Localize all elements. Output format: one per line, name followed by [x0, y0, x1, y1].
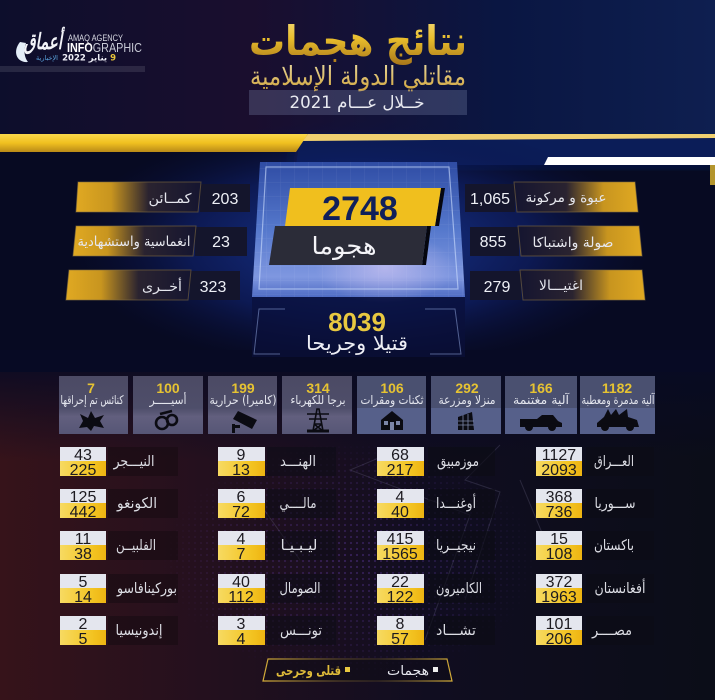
country: Philippines: 11 [75, 531, 91, 548]
icon: damaged car [597, 409, 639, 431]
country: Syria: ســـوريا [594, 496, 636, 512]
stat tile: homes and farms [431, 376, 501, 434]
country: Syria: 736 [546, 504, 572, 521]
country: Congo [60, 489, 178, 521]
stat tile: prisoners: 100 [156, 380, 180, 396]
stat tile: burned churches [59, 376, 128, 434]
stat tile: electricity towers: برجا للكهرباء [290, 393, 346, 408]
stat tile: prisoners [133, 376, 203, 434]
attack type: suicide operations [73, 226, 247, 256]
country: Niger: النيـــجر [113, 454, 154, 470]
stat tile: burned churches: كنائس تم إحراقها [60, 393, 124, 408]
country: Mozambique: 68 [391, 447, 409, 464]
country: Somalia: الصومال [280, 581, 320, 597]
country: Tunisia: تونـــس [280, 623, 322, 639]
stat tile: electricity towers: 314 [306, 380, 330, 396]
country: Syria [536, 489, 654, 521]
agency name: AMAQ AGENCY [68, 33, 123, 43]
country: Philippines [60, 531, 178, 563]
country: Mali [218, 489, 336, 521]
icon: camera [232, 411, 257, 433]
country: Somalia: 40 [232, 574, 250, 591]
country: Uganda: 4 [396, 489, 405, 506]
country: Burkina Faso: بوركينافاسو [116, 581, 177, 597]
stat tile: burned churches: 7 [87, 380, 95, 396]
country: Philippines: 38 [74, 546, 92, 563]
country: Chad: تشـــاد [436, 623, 476, 639]
country: Mali: 72 [232, 504, 250, 521]
country: Chad: 8 [396, 616, 405, 633]
country: India: 13 [232, 462, 250, 479]
killed label: قتيلا وجريحا [306, 331, 408, 355]
country: Burkina Faso: 5 [79, 574, 88, 591]
country: Cameroon: الكاميرون [436, 581, 482, 597]
country: Mali: مالــــي [280, 496, 316, 512]
country: Syria: 368 [546, 489, 572, 506]
date: 9 يناير 2022 [62, 54, 116, 64]
stat tile: thermal cameras: 199 [231, 380, 255, 396]
country: India [218, 447, 336, 479]
attacks total: 2748 [322, 190, 398, 228]
country: Iraq: 2093 [541, 462, 577, 479]
icon: house [458, 412, 474, 430]
country: Pakistan: 15 [550, 531, 568, 548]
attack type: other: أخــرى [142, 277, 182, 295]
killed total: 8039 [328, 307, 386, 337]
country: Congo: 125 [70, 489, 96, 506]
icon: pylon [307, 409, 329, 431]
attack type: suicide operations: 23 [212, 234, 230, 251]
country: Chad: 57 [391, 631, 409, 648]
stat tile: barracks: 106 [380, 380, 404, 396]
country: Nigeria: 415 [387, 531, 413, 548]
stat tile: homes and farms: منزلا ومزرعة [438, 393, 496, 408]
country: Mozambique: موزمبيق [437, 454, 479, 470]
country: Cameroon: 22 [391, 574, 409, 591]
country: Libya: ليـبـيـا [280, 538, 318, 554]
country: Indonesia: إندونيسيا [116, 623, 162, 639]
country: Philippines: الفلبيــن [116, 538, 156, 554]
country: Tunisia: 4 [237, 631, 246, 648]
stat tile: seized vehicles [505, 376, 577, 434]
attacks label [269, 226, 431, 265]
country: Egypt [536, 616, 654, 648]
country: Uganda [377, 489, 495, 521]
stat tile: barracks [357, 376, 426, 434]
stat tile: destroyed vehicles [580, 376, 655, 434]
stat tile: thermal cameras [208, 376, 277, 434]
year text: خــلال عـــام 2021 [290, 93, 424, 113]
attack type: raids and clashes: صولة واشتباكا [532, 235, 614, 251]
country: Uganda: أوغنـــدا [436, 493, 476, 512]
country: Burkina Faso [60, 574, 178, 606]
country: Cameroon: 122 [387, 589, 413, 606]
icon: explosion [79, 411, 104, 431]
attack type: assassination [470, 270, 645, 300]
country: Egypt: 101 [546, 616, 572, 633]
year box [249, 90, 467, 115]
main heading: نتائج هجمات [249, 17, 467, 65]
country: Mozambique [377, 447, 495, 479]
panel: attacks background [252, 162, 465, 297]
country: Tunisia [218, 616, 336, 648]
country: Afghanistan: أفغانستان [594, 578, 646, 597]
attack type: assassination: 279 [484, 279, 510, 296]
country: Mozambique: 217 [387, 462, 413, 479]
country: Congo: الكونغو [116, 496, 157, 512]
attack type: ambush [76, 182, 250, 212]
logo wordmark: أعماق [24, 26, 65, 55]
icon: pickup truck [520, 415, 562, 431]
attack type: explosive devices: عبوة و مركونة [526, 190, 606, 206]
attacks label: هجوما [312, 232, 376, 260]
country: Libya: 4 [237, 531, 246, 548]
country: Indonesia [60, 616, 178, 648]
subtitle: مقاتلي الدولة الإسلامية [250, 62, 466, 92]
attack type: ambush: كمــائن [148, 191, 192, 207]
country: India: 9 [237, 447, 246, 464]
country: Tunisia: 3 [237, 616, 246, 633]
central panel [252, 162, 465, 357]
country: Niger: 225 [70, 462, 96, 479]
country: Nigeria: نيجيــريا [436, 538, 476, 554]
country: Afghanistan: 372 [546, 574, 572, 591]
attacks total [285, 188, 445, 228]
country: Pakistan [536, 531, 654, 563]
icon: logo swoosh [16, 42, 28, 62]
attack type: other [66, 270, 240, 300]
icon: building [381, 411, 403, 430]
country: Afghanistan [536, 574, 654, 606]
country: Cameroon [377, 574, 495, 606]
country: Somalia [218, 574, 336, 606]
country: Congo: 442 [70, 504, 96, 521]
country: Libya: 7 [237, 546, 246, 563]
attack type: explosive devices: 1,065 [470, 191, 510, 208]
attack type: assassination: اغتيـــالا [539, 278, 583, 294]
country: Nigeria: 1565 [382, 546, 418, 563]
stat tile: barracks: ثكنات ومقرات [360, 393, 424, 408]
gold divider stripe [0, 134, 715, 185]
attack type: ambush: 203 [212, 191, 238, 208]
stat tile: electricity towers [282, 376, 352, 434]
attack type: raids and clashes: 855 [480, 234, 506, 251]
logo: Amaq agency infographic [16, 26, 142, 64]
legend: killed and wounded: قتلى وجرحى [276, 664, 341, 679]
panel: killed and wounded [252, 297, 465, 357]
country: Iraq: العـــراق [594, 454, 634, 470]
stat tile: destroyed vehicles: 1182 [602, 380, 632, 396]
country: Somalia: 112 [228, 589, 254, 606]
country: Chad [377, 616, 495, 648]
country: Iraq [536, 447, 654, 479]
country: Uganda: 40 [391, 504, 409, 521]
stat tile: destroyed vehicles: آلية مدمرة ومعطبة [582, 392, 655, 408]
stat tile: prisoners: أسيـــــر [149, 392, 186, 408]
country: Afghanistan: 1963 [541, 589, 577, 606]
legend [263, 659, 452, 681]
country: Indonesia: 2 [79, 616, 88, 633]
attack type: suicide operations: انغماسية واستشهادية [78, 234, 190, 250]
stat tile: seized vehicles: 166 [529, 380, 553, 396]
country: Niger: 43 [74, 447, 92, 464]
attack type: other: 323 [200, 279, 226, 296]
country: Mali: 6 [237, 489, 246, 506]
country: Niger [60, 447, 178, 479]
country: Egypt: مصــــر [591, 623, 632, 639]
infographic label: INFOGRAPHIC [67, 41, 142, 55]
attack type: raids and clashes [470, 226, 642, 256]
country: Iraq: 1127 [542, 447, 576, 464]
icon: handcuffs [156, 411, 177, 429]
country: Indonesia: 5 [79, 631, 88, 648]
country: Burkina Faso: 14 [74, 589, 92, 606]
country: Libya [218, 531, 336, 563]
legend: attacks: هجمات [387, 664, 429, 679]
attack type: explosive devices [465, 182, 638, 212]
logo sub-label: الإخبارية [36, 54, 58, 62]
stat tile: homes and farms: 292 [455, 380, 479, 396]
country: Pakistan: باكستان [594, 538, 634, 554]
country: Nigeria [377, 531, 495, 563]
country: India: الهنـــد [280, 454, 316, 470]
stat tile: seized vehicles: آلية مغتنمة [513, 392, 570, 407]
country: Egypt: 206 [546, 631, 572, 648]
stat tile: thermal cameras: (كاميرا) حرارية [210, 393, 276, 408]
country: Pakistan: 108 [546, 546, 572, 563]
title [249, 17, 467, 115]
